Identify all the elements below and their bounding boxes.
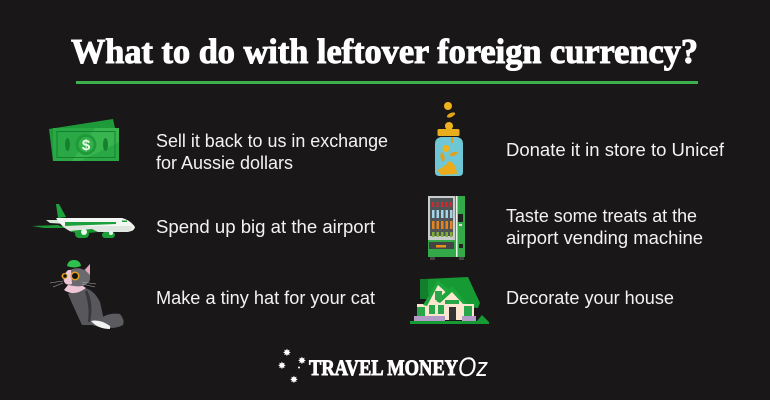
text: spend: Spend up big at the airport: [156, 216, 376, 237]
icon: house: [410, 277, 489, 324]
logo: Travel Money Oz: ✸: [278, 361, 286, 372]
logo: Travel Money Oz: [278, 348, 488, 386]
logo: Travel Money Oz: ✸: [298, 356, 306, 367]
logo: Travel Money Oz: Oz: [458, 352, 488, 382]
text: vending line 1: Taste some treats at the: [506, 205, 697, 226]
text: sell back: Sell it back to us in exchange: [156, 130, 388, 151]
icon: cat with hat: [50, 260, 124, 329]
icon: banknotes: [49, 119, 119, 161]
logo: Travel Money Oz: TRAVEL MONEY: [309, 355, 458, 380]
icon: coin jar: [435, 102, 463, 176]
title: What to do with leftover foreign currency?: [71, 32, 698, 71]
title underline: [76, 81, 698, 84]
text: vending line 2: airport vending machine: [506, 227, 703, 248]
logo: Travel Money Oz: ✸: [283, 348, 291, 359]
icon: vending machine: [428, 196, 465, 260]
logo: Travel Money Oz: ✸: [290, 375, 298, 386]
icon: banknotes: $: [82, 137, 91, 154]
text: decorate: Decorate your house: [506, 287, 674, 308]
text: for Aussie dollars: for Aussie dollars: [156, 152, 293, 173]
text: donate: Donate it in store to Unicef: [506, 139, 725, 160]
icon: airplane: [32, 204, 135, 238]
text: cat hat: Make a tiny hat for your cat: [156, 287, 376, 308]
